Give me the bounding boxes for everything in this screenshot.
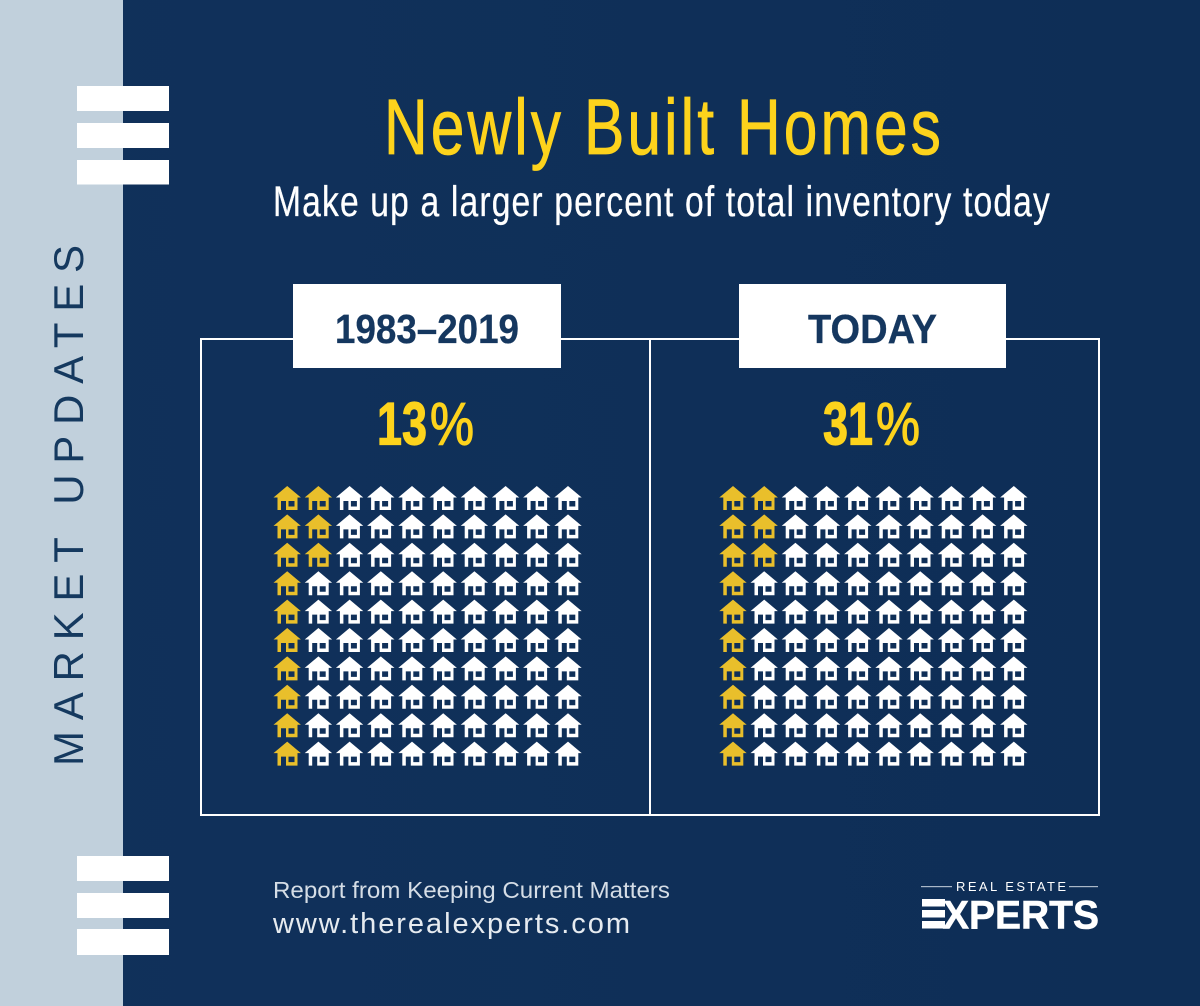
stat: 31%: % — [876, 390, 920, 458]
sidebar — [0, 0, 123, 1006]
panel: 1983-2019 — [274, 284, 582, 766]
logo: real estate experts: XPERTS — [943, 894, 1099, 938]
comparison frame — [201, 339, 1099, 815]
panel: today — [719, 284, 1028, 766]
stat: 13%: 13 — [377, 390, 427, 458]
footer source: Report from Keeping Current Matters — [273, 877, 670, 903]
title: Newly Built Homes — [384, 82, 944, 171]
label box: today: TODAY — [808, 306, 937, 352]
bottom bars decoration — [77, 856, 169, 955]
top bars decoration — [77, 86, 169, 184]
vertical label: market updates: MARKET UPDATES — [45, 245, 92, 766]
footer website: www.therealexperts.com — [272, 908, 630, 940]
logo: real estate experts: REAL ESTATE — [956, 879, 1066, 894]
stat: 13%: % — [430, 390, 474, 458]
logo: real estate experts — [921, 879, 1099, 938]
house grid: 13 of 100 highlighted — [274, 486, 582, 766]
house grid: today — [719, 486, 1028, 766]
stat: 13% — [377, 390, 474, 458]
label box: 1983-2019: 1983–2019 — [335, 306, 519, 352]
stat: 31% — [823, 390, 920, 458]
stat: 31%: 31 — [823, 390, 873, 458]
label box: today — [739, 284, 1006, 368]
label box: 1983-2019 — [293, 284, 561, 368]
